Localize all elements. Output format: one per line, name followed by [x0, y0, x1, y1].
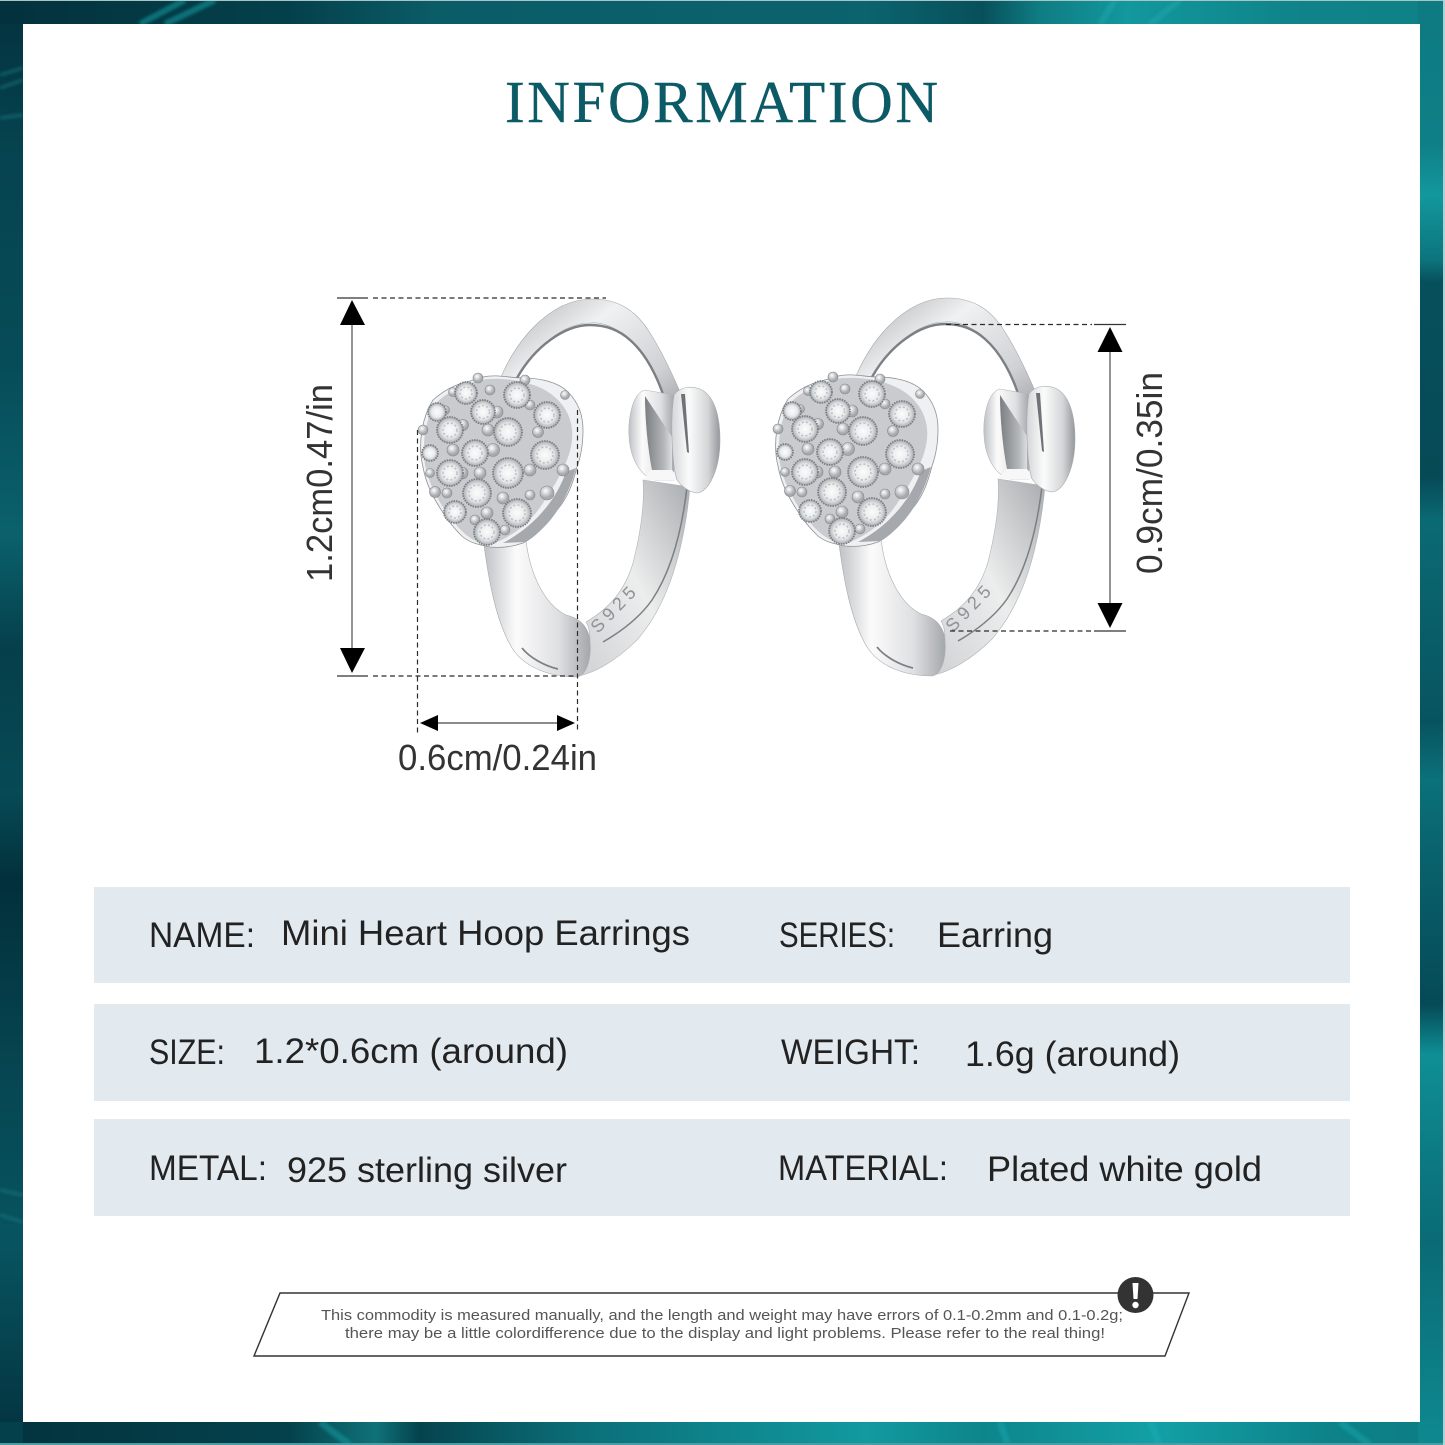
- hoop inner edge: [517, 325, 666, 404]
- spec row: metal and material: MATERIAL:: [778, 1149, 948, 1188]
- lower right band: [578, 480, 690, 676]
- clasp ledge: [643, 470, 680, 480]
- spec row: size and weight: [94, 1004, 1350, 1101]
- stamp S925: S925: [586, 583, 640, 637]
- disclaimer note: [254, 1277, 1189, 1356]
- icon: warning: [1118, 1277, 1154, 1313]
- spec row: name and series: Mini Heart Hoop Earrings: [281, 914, 690, 953]
- inner height label: 0.9cm/0.35in: [1129, 372, 1170, 574]
- pave stones: [418, 373, 570, 545]
- width dimension: left earring: [398, 410, 597, 778]
- spec row: name and series: NAME:: [149, 916, 255, 955]
- clasp recess: [645, 396, 672, 470]
- spec row: metal and material: METAL:: [149, 1149, 267, 1188]
- disclaimer note: there may be a little colordifference due to the display and light problems. Please refer to the real thing!: [345, 1325, 1105, 1342]
- height dimension: left earring: [299, 298, 606, 676]
- heart pave area: [424, 379, 572, 544]
- spec row: name and series: SERIES:: [779, 916, 895, 955]
- disclaimer note: This commodity is measured manually, and the length and weight may have errors of 0.1-0.2mm and 0.1-0.2g;: [321, 1307, 1123, 1324]
- clasp right lobe: [672, 387, 720, 493]
- spec row: size and weight: 1.6g (around): [965, 1035, 1180, 1074]
- earring: left, with measurements base: [418, 299, 720, 677]
- heart plate: [421, 376, 583, 547]
- height dimension: right earring: [946, 324, 1170, 631]
- spec row: metal and material: [94, 1119, 1350, 1216]
- width label: 0.6cm/0.24in: [398, 737, 597, 778]
- upper hoop band: [498, 299, 680, 437]
- spec row: metal and material: 925 sterling silver: [287, 1151, 567, 1190]
- spec row: name and series: [94, 887, 1350, 983]
- spec row: size and weight: SIZE:: [149, 1033, 225, 1072]
- title: INFORMATION: [505, 69, 938, 135]
- lower band rim line: [603, 487, 687, 642]
- height label: 1.2cm0.47/in: [299, 384, 340, 582]
- spec row: size and weight: 1.2*0.6cm (around): [254, 1032, 568, 1071]
- heart lower rim shadow: [503, 468, 576, 543]
- lower left band: [484, 540, 590, 677]
- clasp left lobe: [629, 390, 674, 480]
- spec row: metal and material: Plated white gold: [987, 1150, 1262, 1189]
- spec row: size and weight: WEIGHT:: [781, 1033, 920, 1072]
- earring: right: [773, 298, 1075, 676]
- spec row: name and series: Earring: [937, 916, 1053, 955]
